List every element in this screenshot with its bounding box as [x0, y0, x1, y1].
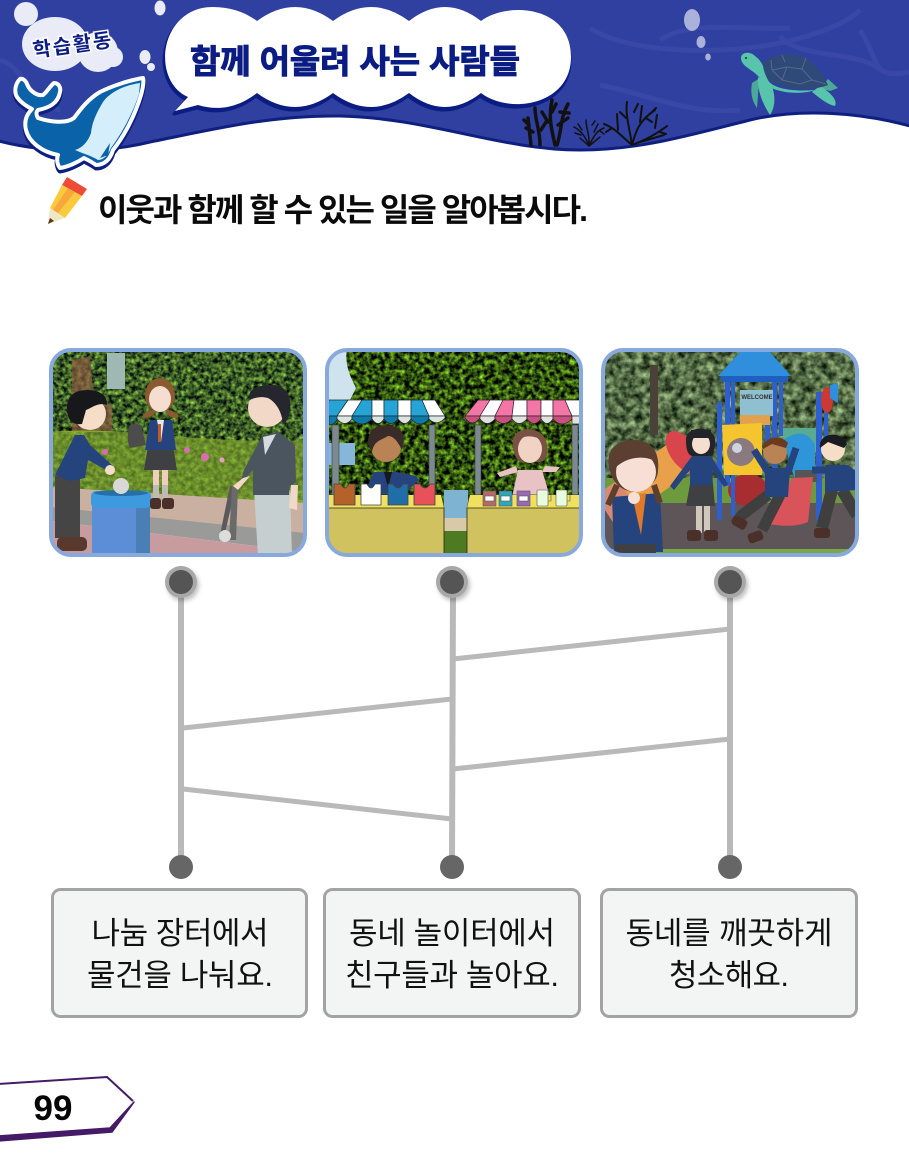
left counter: [327, 495, 444, 556]
air bubbles near turtle: [684, 9, 711, 60]
blue awning: [327, 400, 445, 424]
play structure frame: [717, 376, 828, 520]
balloon toy: [821, 383, 838, 413]
yellow panel: [722, 423, 762, 475]
girl in centre: [670, 429, 728, 541]
page number tag: [0, 1077, 134, 1141]
seaweed and coral: [524, 100, 667, 146]
connecting ladder lines: [181, 590, 730, 862]
text box: sharing market: 나눔 장터에서: [92, 916, 268, 951]
trees background: [605, 352, 855, 478]
badge: learning activity: 학습활동: [31, 29, 113, 62]
welcome sign: [740, 390, 773, 425]
hedge: [51, 430, 305, 505]
air bubbles near whale: [140, 0, 166, 71]
sidewalk and curb: [51, 487, 305, 556]
brick wall: [72, 356, 112, 432]
text box: playground: 친구들과 놀아요.: [345, 958, 559, 993]
path and grass: [444, 518, 467, 553]
tube slide: [605, 425, 768, 510]
text box: sharing market: 물건을 나눠요.: [87, 958, 273, 993]
panel: cleaning the neighborhood: [51, 350, 305, 556]
text box: sharing market: [52, 890, 306, 1016]
whale mascot: [15, 78, 143, 171]
tongs and paper: [219, 486, 238, 542]
text box: cleaning: 동네를 깨끗하게: [626, 916, 832, 951]
cheering boy: [731, 438, 796, 544]
tree background: [329, 352, 579, 506]
right counter: [467, 495, 581, 556]
text box: cleaning: 청소해요.: [669, 958, 789, 993]
welcome sign: WELCOME: [741, 395, 773, 401]
sea turtle: [741, 53, 838, 115]
panel 1 border: [51, 350, 305, 555]
ivy wall background: [53, 352, 303, 441]
girl with bag: [128, 378, 180, 509]
jars and mugs for sale: [483, 490, 570, 506]
panel: playground: [603, 350, 857, 557]
grass and rubber ground: [603, 478, 857, 557]
badge: learning activity: [14, 2, 123, 72]
pink awning: [465, 400, 581, 424]
red slide: [760, 477, 813, 526]
running boy: [812, 435, 857, 538]
top connector dots: [165, 566, 746, 598]
panel: sharing market: [327, 350, 581, 556]
sky and water: [327, 350, 468, 520]
right stall posts: [475, 425, 578, 497]
boy at bin: [55, 390, 115, 551]
text box: cleaning: [602, 890, 856, 1016]
icon: pencil: [48, 177, 87, 224]
text box: playground: 동네 놀이터에서: [349, 916, 555, 951]
speech bubble title: [164, 7, 571, 114]
boy with tongs: [233, 385, 298, 556]
left seller: [368, 425, 419, 500]
heading instruction: 이웃과 함께 할 수 있는 일을 알아봅시다.: [98, 192, 588, 228]
tree trunk: [650, 365, 658, 435]
trash bin: [91, 478, 151, 556]
right seller: [497, 429, 560, 497]
panel 3 border: [603, 350, 857, 555]
glass window: [107, 353, 125, 389]
panel 2 border: [327, 350, 581, 555]
large girl foreground: [608, 440, 663, 556]
roof: [718, 352, 791, 382]
header wave banner: [0, 0, 909, 150]
green and blue upper deck: [783, 428, 817, 482]
left stall posts: [332, 425, 435, 497]
title text: 함께 어울려 사는 사람들: [190, 43, 520, 80]
text box: playground: [324, 890, 580, 1016]
shirts for sale: [334, 484, 435, 505]
bottom connector dots: [169, 855, 742, 879]
page number: 99: [34, 1089, 72, 1128]
